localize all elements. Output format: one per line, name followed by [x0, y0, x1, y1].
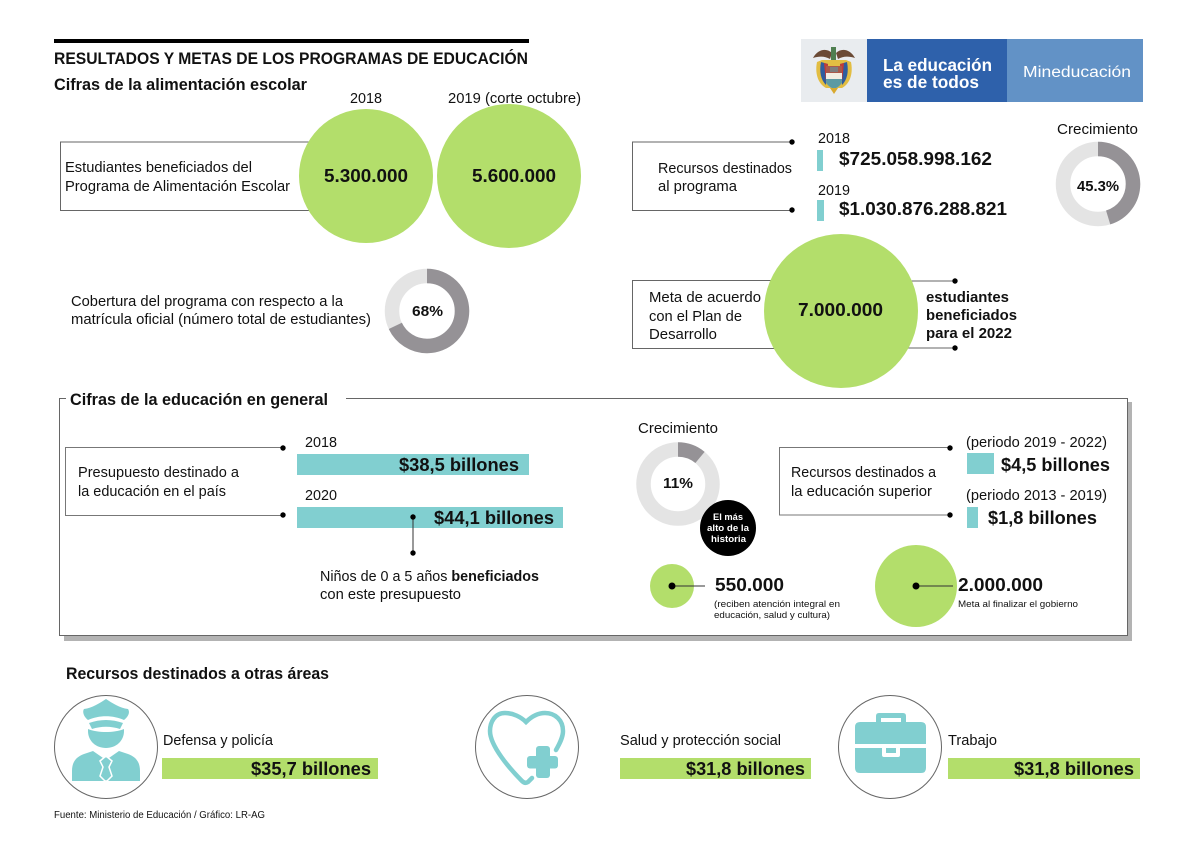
badge: highest in history: historia: [711, 534, 747, 545]
heading: general education figures: Cifras de la educación en general: [70, 391, 328, 409]
higher education resources: la educación superior: [791, 484, 932, 500]
icon: heart with cross: [476, 696, 578, 798]
bar: 2018 budget: [297, 454, 529, 475]
badge: highest in history: El más: [713, 512, 743, 523]
title: RESULTADOS Y METAS DE LOS PROGRAMAS DE EDUCACIÓN: [54, 49, 528, 68]
donut chart: 45.3% growth: 45.3%: [1077, 179, 1119, 195]
icon: police officer: [54, 696, 158, 798]
national education budget: [66, 435, 563, 603]
panel: development plan target: para el 2022: [926, 326, 1012, 342]
donut chart: 11% growth: Crecimiento: [638, 421, 718, 437]
panel: resources for the program: 2018: [818, 131, 850, 147]
panel: students benefited: [60, 91, 581, 248]
item: labor: $31,8 billones: [1014, 758, 1134, 779]
higher education resources: (periodo 2019 - 2022): [966, 435, 1107, 451]
donut chart: 45.3% growth: Crecimiento: [1057, 122, 1138, 138]
donut chart: 68% coverage: [71, 276, 462, 346]
donut chart: 11% growth: 11%: [663, 476, 693, 492]
stat: 550,000 children: educación, salud y cultura): [714, 610, 830, 621]
logo: Mineducación: es de todos: [883, 72, 979, 92]
heading: other areas: Recursos destinados a otras áreas: [66, 665, 329, 683]
higher education resources: $1,8 billones: [988, 507, 1097, 528]
circle: 2018 students: [299, 109, 433, 243]
circle: 7,000,000 target: [764, 234, 918, 388]
item: defense and police: [54, 696, 378, 798]
header: [54, 39, 529, 68]
higher education resources: $4,5 billones: [1001, 454, 1110, 475]
bar: 2018 budget: $38,5 billones: [399, 454, 519, 475]
year label 2018: 2018: [350, 91, 382, 107]
logo: Mineducación: La educación: [883, 55, 992, 75]
stat: 2,000,000 goal: Meta al finalizar el gobierno: [958, 599, 1078, 610]
item: health and social protection: $31,8 billones: [686, 758, 805, 779]
panel: development plan target: [632, 234, 1017, 388]
panel: development plan target: estudiantes: [926, 290, 1009, 306]
callout: children 0 to 5: [320, 514, 539, 603]
item: health and social protection: Salud y protección social: [620, 733, 781, 749]
circle: 2018 students: 5.300.000: [324, 166, 408, 186]
stat: 2,000,000 goal: [875, 545, 1078, 627]
panel: development plan target: con el Plan de: [649, 309, 742, 325]
icon: coat of arms: [813, 47, 855, 94]
panel: resources for the program: Recursos destinados: [658, 161, 792, 177]
stat: 2,000,000 goal: 2.000.000: [958, 575, 1043, 595]
national education budget: Presupuesto destinado a: [78, 465, 240, 481]
panel: development plan target: beneficiados: [926, 308, 1017, 324]
logo: Mineducación: Mineducación: [1023, 64, 1131, 81]
donut chart: 45.3% growth: [1057, 122, 1138, 219]
item: labor: Trabajo: [948, 733, 997, 749]
panel: students benefited: Programa de Alimentación Escolar: [65, 179, 290, 195]
badge: highest in history: alto de la: [707, 523, 750, 534]
source note: Fuente: Ministerio de Educación / Gráfico: LR-AG: [54, 810, 265, 821]
circle: 2019 students: [437, 104, 581, 248]
stat: 550,000 children: 550.000: [715, 575, 784, 595]
item: labor: [838, 696, 1140, 798]
bar: 2020 budget: $44,1 billones: [434, 507, 554, 528]
callout: children 0 to 5: Niños de 0 a 5 años beneficiados: [320, 569, 539, 585]
panel: development plan target: Meta de acuerdo: [649, 290, 761, 306]
donut chart: 68% coverage: 68%: [412, 304, 443, 320]
stat: 550,000 children: (reciben atención integral en: [714, 599, 840, 610]
stat: 550,000 children: [650, 564, 840, 621]
panel: resources for the program: al programa: [658, 179, 738, 195]
badge: highest in history: [700, 500, 756, 556]
donut chart: 68% coverage: Cobertura del programa con respecto a la: [71, 294, 344, 310]
year label 2019: 2019 (corte octubre): [448, 91, 581, 107]
higher education resources: (periodo 2013 - 2019): [966, 488, 1107, 504]
panel: resources for the program: 2019: [818, 183, 850, 199]
panel: resources for the program: [632, 131, 1007, 221]
national education budget: 2018: [305, 435, 337, 451]
circle: 2019 students: 5.600.000: [472, 166, 556, 186]
bar: 2020 budget: [297, 507, 563, 528]
heading: school meals figures: Cifras de la alimentación escolar: [54, 76, 308, 94]
logo: Mineducación: [801, 39, 1143, 102]
panel: general education figures: [60, 391, 1132, 641]
circle: 7,000,000 target: 7.000.000: [798, 300, 883, 320]
panel: students benefited: Estudiantes beneficiados del: [65, 160, 252, 176]
donut chart: 68% coverage: matrícula oficial (número total de estudiantes): [71, 312, 371, 328]
panel: resources for the program: $725.058.998.162: [839, 148, 992, 169]
donut chart: 11% growth: [638, 421, 756, 556]
item: health and social protection: [476, 696, 811, 798]
panel: resources for the program: $1.030.876.288.821: [839, 198, 1007, 219]
higher education resources: Recursos destinados a: [791, 465, 937, 481]
icon: briefcase: [838, 696, 942, 798]
national education budget: la educación en el país: [78, 484, 226, 500]
national education budget: 2020: [305, 488, 337, 504]
item: defense and police: Defensa y policía: [163, 733, 274, 749]
item: defense and police: $35,7 billones: [251, 758, 371, 779]
callout: children 0 to 5: con este presupuesto: [320, 587, 461, 603]
panel: development plan target: Desarrollo: [649, 327, 717, 343]
higher education resources: [780, 435, 1110, 528]
